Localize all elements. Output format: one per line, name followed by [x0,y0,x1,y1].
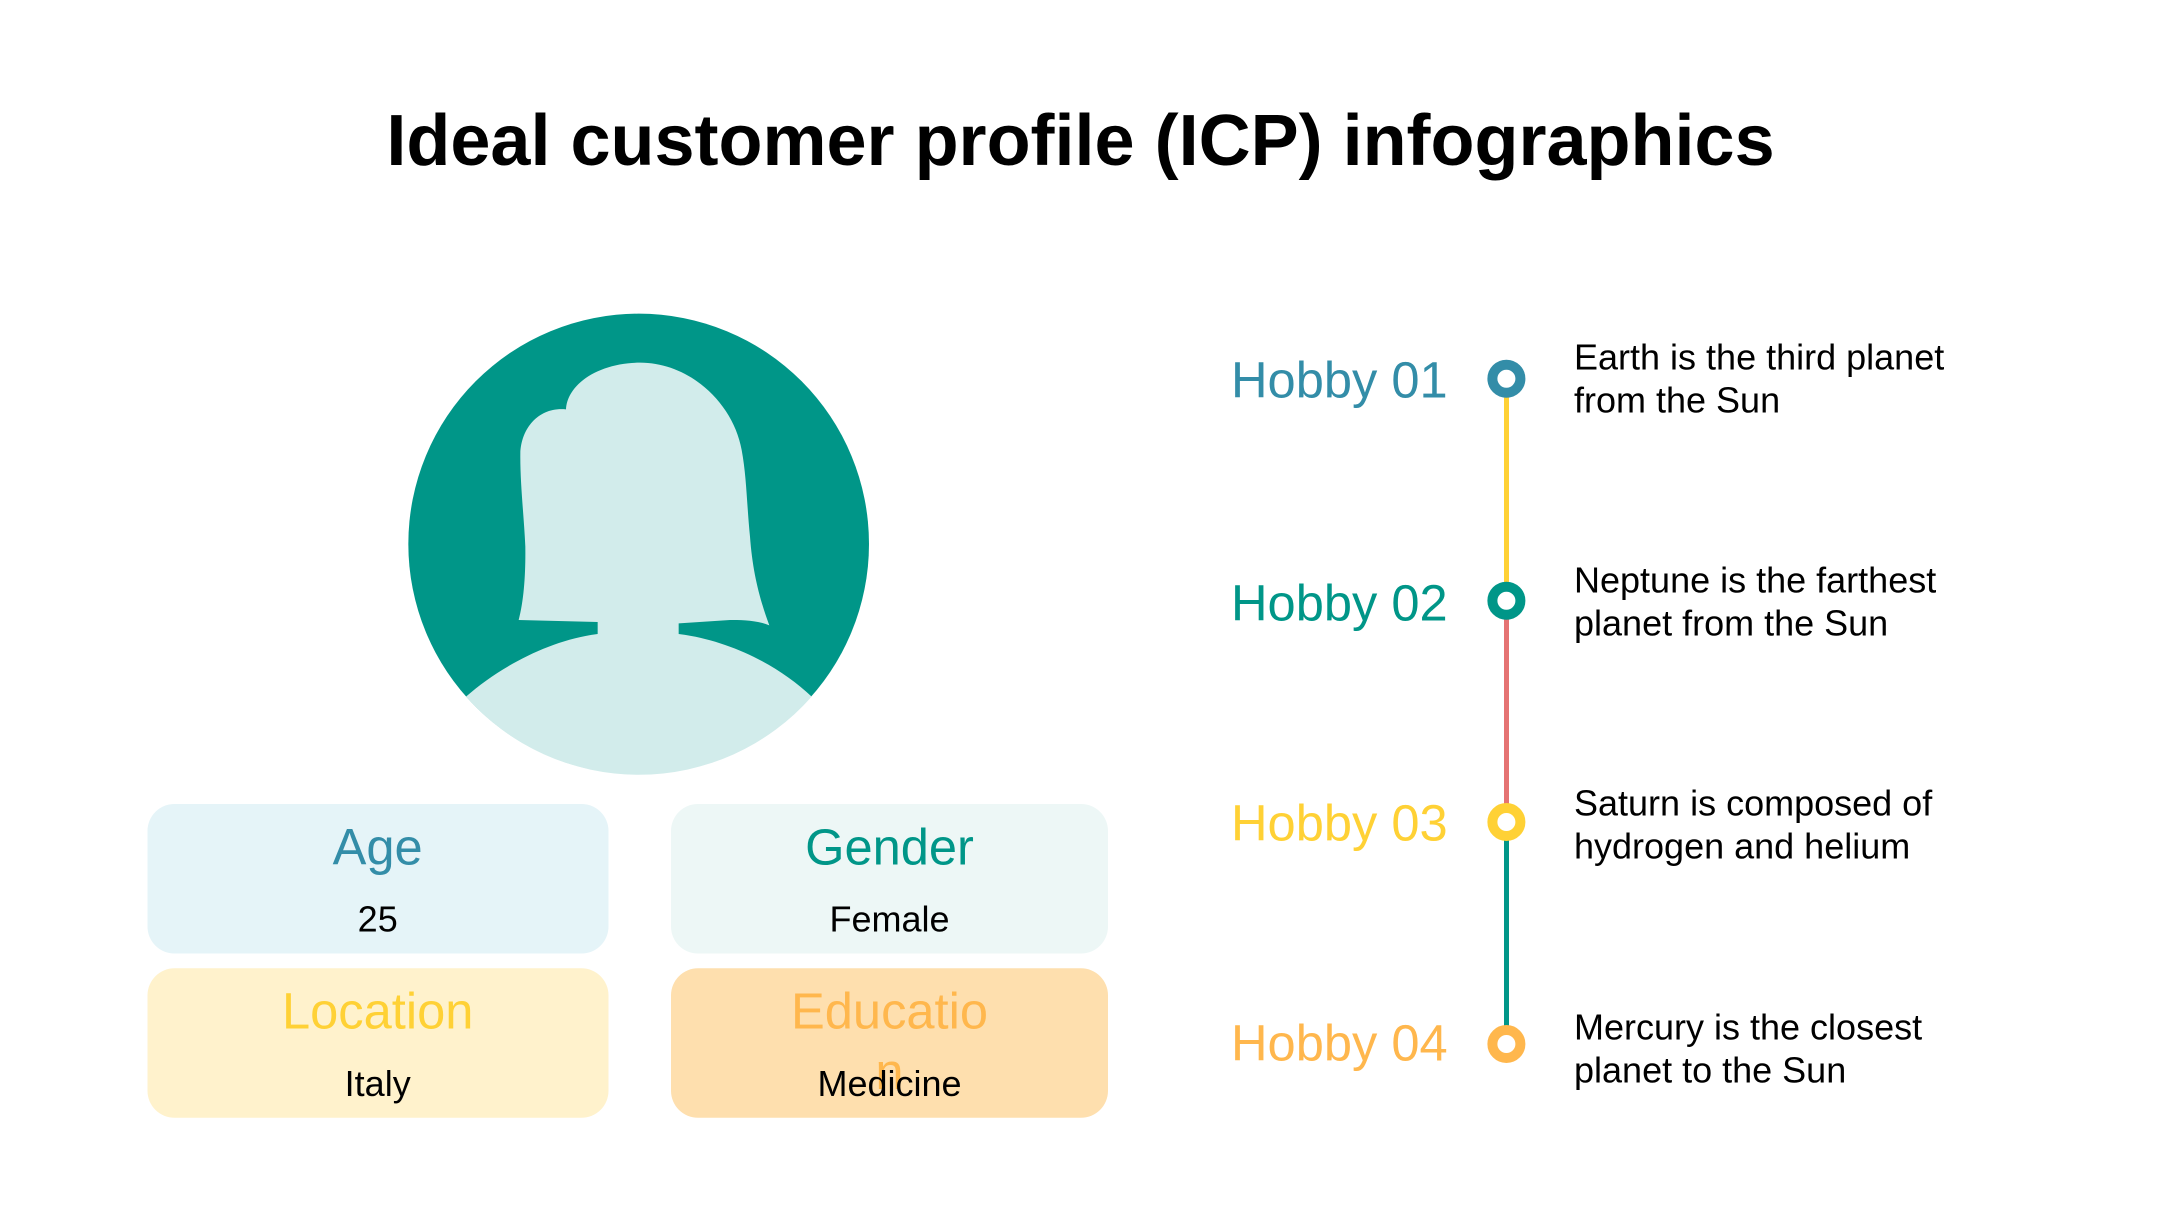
card: age [148,804,608,954]
card: location: Italy [345,1063,411,1104]
card: location [148,968,608,1118]
hobby 04: Mercury is the closest [1574,1006,1922,1047]
card: education: n [875,1043,904,1100]
card: education [671,968,1108,1118]
card: age: Age [333,818,423,876]
hobby 02: Neptune is the farthest [1574,560,1936,601]
hobby 01: Earth is the third planet [1574,336,1944,378]
hobby 02: planet from the Sun [1574,603,1888,644]
card: age: 25 [358,899,398,940]
hobby 01: Hobby 01 [1231,351,1448,408]
card: education: Medicine [817,1063,962,1104]
card: location: Location [282,982,473,1040]
card: gender [671,804,1108,954]
hobby 03: Saturn is composed of [1574,783,1933,824]
title: Ideal customer profile (ICP) infographics [386,101,1775,181]
hobby 03 [1231,783,1933,867]
hobby 04: Hobby 04 [1231,1015,1448,1072]
hobby 04 [1231,1006,1922,1090]
card: gender: Gender [805,818,974,876]
card: education: Educatio [791,982,988,1040]
hobby 02: Hobby 02 [1231,575,1448,632]
hobby 03: Hobby 03 [1231,795,1448,852]
hobby 04: planet to the Sun [1574,1049,1846,1090]
avatar icon: woman silhouette in teal circle [408,314,869,775]
timeline connector lines [1504,379,1509,1044]
hobby 01: from the Sun [1574,380,1780,420]
card: gender: Female [829,899,950,940]
hobby 03: hydrogen and helium [1574,826,1910,867]
hobby 02 [1231,560,1936,644]
hobby 01 [1231,336,1944,420]
